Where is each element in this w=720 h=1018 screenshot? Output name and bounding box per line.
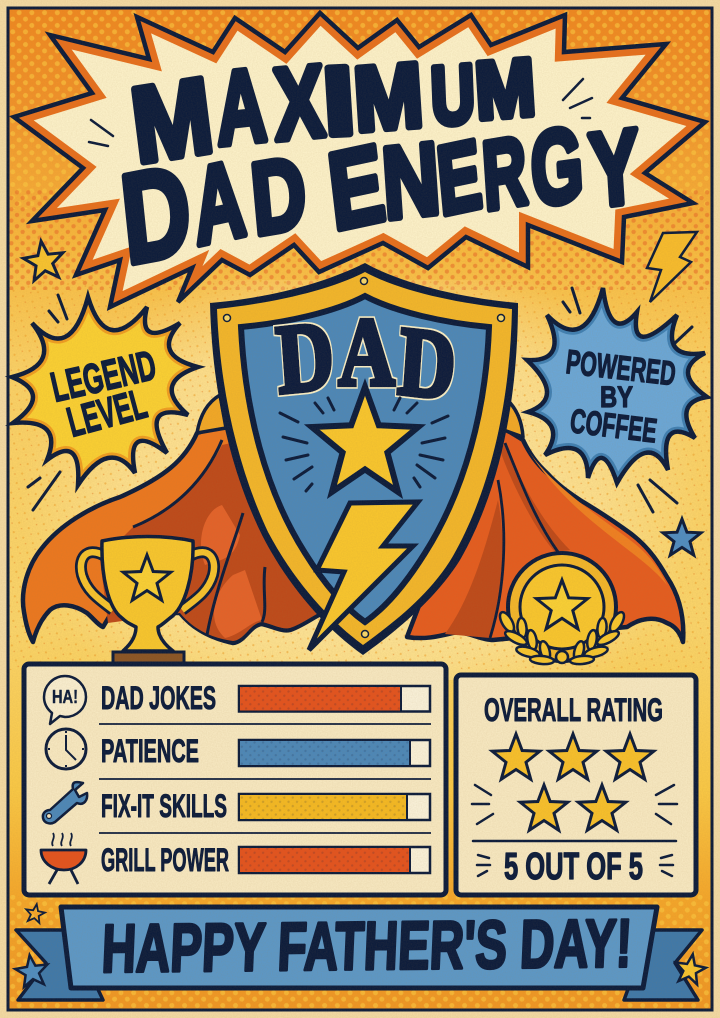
badge: powered by coffee (527, 288, 707, 483)
cape: right side (407, 398, 683, 642)
title: MAXIMUM: I (320, 45, 358, 156)
title: DAD ENERGY: E (319, 125, 391, 254)
icon: lightning bolt top right (647, 232, 697, 302)
label: dad jokes: DAD JOKES (101, 680, 216, 716)
bar: patience (239, 740, 430, 766)
banner: right tail (624, 930, 702, 1000)
title: MAXIMUM: A (212, 49, 269, 168)
banner: left tail (16, 930, 103, 1000)
icon: small yellow star top left (21, 238, 66, 282)
row: patience (46, 729, 430, 769)
trophy (81, 536, 214, 663)
cape (23, 395, 683, 643)
title: DAD ENERGY: N (377, 122, 444, 241)
title: DAD ENERGY: A (183, 141, 251, 269)
badge: legend level: LEGEND (46, 341, 160, 411)
bar: dad jokes (239, 686, 430, 712)
banner: happy father's day (16, 905, 702, 1000)
title: DAD ENERGY: E (429, 122, 487, 236)
rating stars (492, 734, 654, 830)
shield (210, 263, 518, 655)
title starburst (14, 13, 705, 307)
label: grill power: GRILL POWER (101, 842, 229, 878)
title: DAD ENERGY: D (244, 137, 311, 257)
shield: lightning bolt (309, 502, 418, 650)
row: dad jokes (44, 676, 430, 724)
panel: dad stats (24, 664, 446, 895)
icon: HA speech bubble: HA! (52, 687, 78, 707)
badge: legend level: LEVEL (62, 380, 152, 446)
icon: blue star right (663, 519, 701, 555)
icon: clock (46, 729, 86, 769)
title: DAD ENERGY: Y (584, 109, 644, 230)
row: grill power (41, 833, 430, 884)
title: MAXIMUM: U (428, 48, 477, 143)
badge: powered by coffee: BY (600, 381, 633, 414)
label: fix-it skills: FIX-IT SKILLS (101, 788, 227, 824)
title: DAD ENERGY: D (111, 141, 198, 291)
shield: central star (312, 387, 418, 492)
panel: overall rating (456, 675, 696, 895)
badge: legend level (12, 297, 198, 485)
title: DAD ENERGY: G (525, 108, 587, 229)
cape: left side (23, 395, 323, 643)
shield: DAD lettering: DAD (273, 299, 459, 421)
icon: wrench (43, 782, 87, 823)
badge: powered by coffee: COFFEE (568, 402, 659, 451)
bar: grill power (239, 847, 430, 873)
action lines around badges (28, 288, 692, 512)
shield: rays around star (280, 398, 448, 491)
bar: fix-it skills (239, 794, 430, 820)
icons: banner stars (14, 903, 708, 988)
title: MAXIMUM: X (270, 45, 327, 162)
score: 5 out of 5: 5 OUT OF 5 (504, 846, 643, 888)
title: MAXIMUM: M (124, 56, 219, 186)
title: MAXIMUM: M (350, 45, 426, 151)
medal with laurel (497, 553, 627, 665)
icon: grill (41, 833, 86, 884)
title: MAXIMUM: M (472, 43, 538, 137)
label: patience: PATIENCE (101, 733, 199, 769)
banner: main ribbon (61, 907, 657, 988)
shield: blue field (241, 296, 489, 622)
row: fix-it skills (43, 782, 430, 824)
icon: HA speech bubble (44, 676, 86, 724)
title: DAD ENERGY: R (476, 118, 531, 231)
